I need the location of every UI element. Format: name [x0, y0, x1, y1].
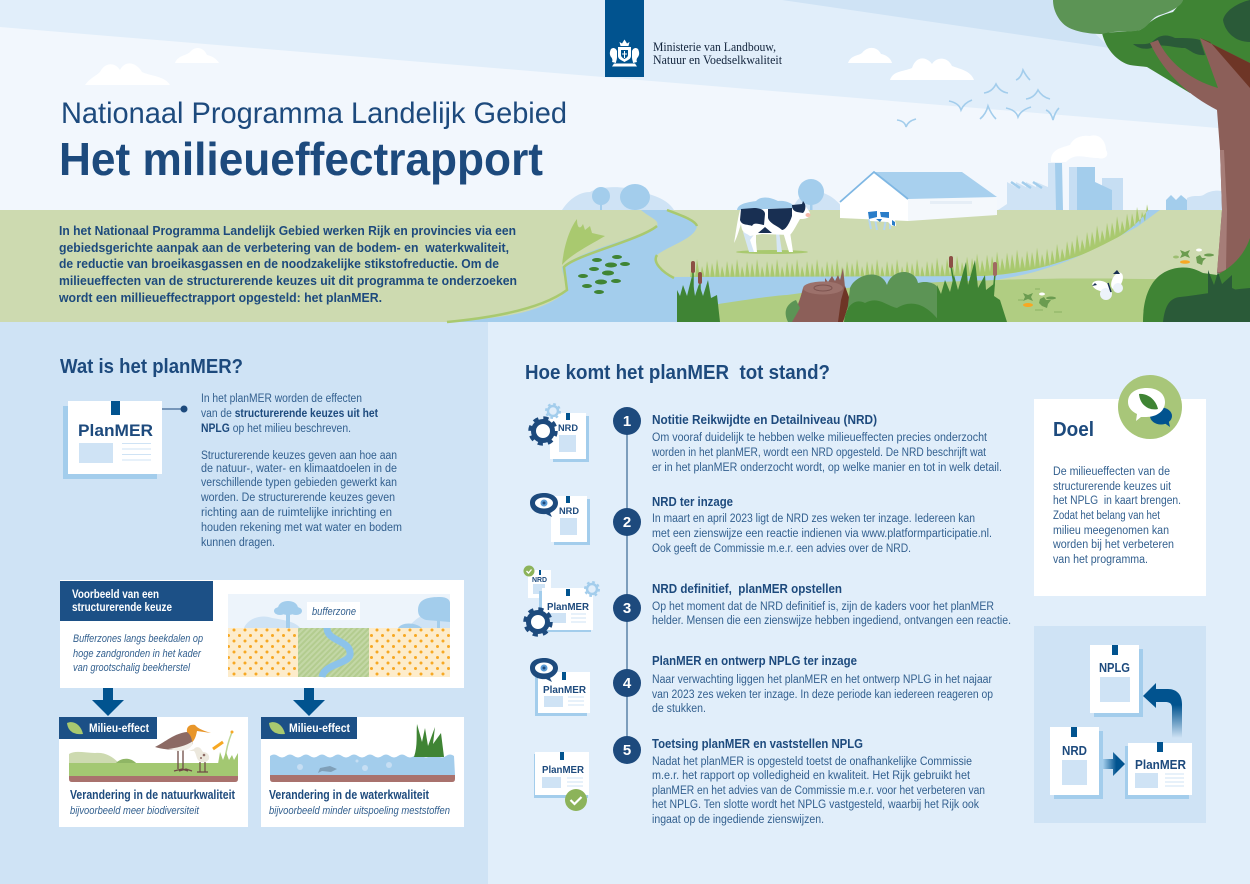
- icon: step 5: PlanMER: [542, 765, 585, 776]
- text: doel: worden bij het verbeteren: [1052, 539, 1174, 551]
- logo ribbon: [605, 0, 644, 77]
- step 5 text: ingaat op de ingediende zienswijzen.: [652, 814, 824, 826]
- reeds left: [677, 261, 720, 322]
- step 3 text: [652, 582, 1011, 627]
- title: Het milieueffectrapport: [59, 133, 543, 185]
- icon: step 3: PlanMER: [547, 602, 590, 613]
- sky: [0, 0, 1250, 210]
- document: planMER: [1125, 742, 1192, 799]
- riverside reeds: [562, 204, 1150, 278]
- text: explanation planMER: In het planMER worden de effecten: [201, 393, 362, 405]
- step 2 text: [652, 495, 992, 555]
- intro text: wordt een millieueffectrapport opgesteld: het planMER.: [58, 290, 382, 305]
- cow: [734, 201, 810, 254]
- step 5 text: het NPLG. Ten slotte wordt het NPLG vastgesteld, waarbij het Rijk ook: [652, 799, 979, 811]
- timeline: 5: [623, 742, 631, 759]
- step 4 text: PlanMER en ontwerp NPLG ter inzage: [652, 654, 857, 668]
- text: doel: structurerende keuzes uit: [1053, 481, 1172, 493]
- icon: step 2: NRD: [559, 506, 579, 517]
- step 3 text: NRD definitief, planMER opstellen: [652, 582, 842, 596]
- icon: step 5: [534, 752, 589, 811]
- background: lower panels: [0, 322, 1250, 884]
- arrow left: [92, 688, 124, 716]
- heading: doel: Doel: [1053, 419, 1094, 441]
- step 2 text: NRD ter inzage: [652, 495, 733, 509]
- text: Verandering in de waterkwaliteit: [269, 788, 430, 802]
- text: doel: van het programma.: [1053, 554, 1148, 566]
- text: [269, 788, 450, 817]
- step 4 text: de stukken.: [652, 703, 706, 715]
- text: explanation planMER: Structurerende keuzes geven aan hoe aan: [201, 450, 397, 462]
- heading: hoe komt het planMER tot stand: Hoe komt het planMER tot stand?: [525, 362, 830, 384]
- arrow: planMER to NPLG: [1143, 683, 1182, 738]
- intro text: In het Nationaal Programma Landelijk Gebied werken Rijk en provincies via een: [59, 223, 516, 238]
- chick: [189, 747, 209, 772]
- label: [59, 717, 157, 739]
- heading: voorbeeld: [60, 581, 213, 621]
- step 4 text: [652, 654, 993, 715]
- text: doel: [1052, 466, 1181, 566]
- text: explanation planMER: kunnen dragen.: [201, 537, 275, 549]
- intro text: gebiedsgerichte aanpak aan de verbetering van de bodem- en waterkwaliteit,: [59, 240, 509, 255]
- text: doel: Zodat het belang van het: [1053, 510, 1161, 522]
- text: explanation planMER: worden. De structurerende keuzes geven: [200, 492, 395, 504]
- icon: step 1: [530, 404, 589, 462]
- document: NRD: NRD: [1062, 743, 1087, 758]
- hero illustration: [0, 0, 1250, 322]
- bird: [155, 725, 211, 771]
- step 5 text: planMER en het advies van de Commissie m.e.r. voor het verbeteren van: [652, 785, 985, 797]
- icon: speech bubbles with leaf: [1118, 375, 1182, 439]
- text: Verandering in de natuurkwaliteit: [70, 788, 236, 802]
- text: explanation planMER: van de structurerende keuzes uit het: [201, 408, 378, 420]
- label: [261, 717, 357, 739]
- timeline: [613, 407, 641, 764]
- step 2 text: Ook geeft de Commissie m.e.r. een advies over de NRD.: [652, 543, 911, 555]
- text: doel: het NPLG in kaart brengen.: [1053, 495, 1181, 507]
- birds: [897, 70, 1059, 127]
- step 5 text: Nadat het planMER is opgesteld toetst de onafhankelijke Commissie: [652, 756, 972, 768]
- crest: [610, 40, 639, 66]
- document: NPLG: [1090, 645, 1143, 717]
- document: NRD: [1050, 727, 1103, 799]
- tree stump: [786, 268, 850, 322]
- panel: process diagram: [1034, 626, 1206, 823]
- heading: voorbeeld: Voorbeeld van een: [72, 589, 159, 601]
- arrow: NRD to planMER: [1103, 752, 1125, 776]
- panel: natuurkwaliteit: [59, 717, 248, 827]
- panel: voorbeeld: [60, 580, 464, 688]
- heading: voorbeeld: structurerende keuze: [72, 602, 172, 614]
- icon: step 1: NRD: [558, 423, 578, 434]
- title: Nationaal Programma Landelijk Gebied: [61, 97, 567, 130]
- step 1 text: Om vooraf duidelijk te hebben welke milieueffecten precies onderzocht: [652, 432, 988, 444]
- panel: doel: [1034, 375, 1206, 596]
- text: bufferzones: hoge zandgronden in het kader: [73, 648, 202, 660]
- text: explanation planMER: richting aan de ruimtelijke inrichting en: [201, 507, 392, 519]
- illustration: water: [270, 724, 455, 782]
- text: bufferzones: van grootschalig beekherstel: [73, 662, 190, 674]
- bufferzone illustration: bufferzone: [312, 606, 356, 618]
- step 1 text: [651, 413, 1002, 474]
- icon: planMER document: [63, 401, 188, 479]
- bufferzone illustration: [228, 594, 450, 677]
- step 5 text: [652, 737, 985, 826]
- flowers: [1018, 248, 1214, 312]
- icon: step 4: PlanMER: [543, 685, 587, 696]
- lily pads: [578, 255, 630, 294]
- text: doel: De milieueffecten van de: [1053, 466, 1170, 478]
- icon: step 4: [530, 658, 590, 716]
- ministry name: Natuur en Voedselkwaliteit: [653, 53, 782, 67]
- text: explanation planMER: verschillende typen gebieden gewerkt kan: [201, 477, 397, 489]
- label: Milieu-effect: [289, 723, 350, 735]
- text: bijvoorbeeld meer biodiversiteit: [70, 805, 200, 817]
- text: explanation planMER: NPLG op het milieu beschreven.: [201, 423, 351, 435]
- text: [70, 788, 236, 817]
- barn: [840, 172, 997, 221]
- river: [447, 210, 1160, 322]
- text: explanation planMER: houden rekening met wat water en bodem: [201, 522, 402, 534]
- text: bufferzones: [73, 633, 203, 674]
- branch and trunk: [1150, 38, 1250, 280]
- bottom right bushes: [1143, 238, 1250, 322]
- heading: wat is het planMER: Wat is het planMER?: [60, 356, 243, 378]
- text: bijvoorbeeld minder uitspoeling meststoffen: [269, 805, 450, 817]
- text: bufferzones: Bufferzones langs beekdalen op: [73, 633, 203, 645]
- tree: [1053, 0, 1250, 280]
- step 2 text: met een zienswijze een reactie indienen via www.platformparticipatie.nl.: [652, 528, 992, 540]
- step 3 text: helder. Mensen die een zienswijze hebben ingediend, ontvangen een reactie.: [652, 615, 1011, 627]
- reeds right: [937, 256, 1007, 322]
- step 2 text: In maart en april 2023 ligt de NRD zes weken ter inzage. Iedereen kan: [652, 513, 975, 525]
- icon: step 3: NRD: [532, 577, 547, 584]
- text: explanation planMER: de natuur-, water- en klimaatdoelen in de: [201, 463, 397, 475]
- timeline: 3: [623, 600, 631, 617]
- bushes: [844, 272, 940, 322]
- label: Milieu-effect: [89, 723, 149, 735]
- text: doel: milieu meegenomen kan: [1053, 525, 1169, 537]
- timeline: 1: [623, 413, 631, 430]
- title: [59, 97, 567, 185]
- ministry name: Ministerie van Landbouw,: [653, 40, 776, 54]
- step 3 text: Op het moment dat de NRD definitief is, zijn de kaders voor het planMER: [652, 601, 994, 613]
- clouds: [85, 48, 974, 85]
- step 1 text: worden in het planMER, wordt een NRD opgesteld. De NRD beschrijft wat: [651, 447, 987, 459]
- intro text: de reductie van broeikasgassen en de noodzakelijke stikstofreductie. Om de: [59, 256, 499, 271]
- intro text: milieueffecten van de structurerende keuzes uit dit programma te onderzoeken: [59, 273, 517, 288]
- foreground grass: [718, 278, 1250, 322]
- timeline: 4: [623, 675, 632, 692]
- icon: planMER document: PlanMER: [78, 421, 153, 440]
- panel: waterkwaliteit: [261, 717, 464, 827]
- step 1 text: er in het planMER onderzocht wordt, op welke manier en tot in welk detail.: [652, 462, 1002, 474]
- meadow: [0, 210, 1250, 322]
- orange flower and grass: [213, 730, 238, 764]
- step 4 text: Naar verwachting liggen het planMER en het ontwerp NPLG in het najaar: [652, 674, 992, 686]
- document: planMER: PlanMER: [1135, 757, 1187, 772]
- step 4 text: van 2023 zes weken ter inzage. In deze periode kan iedereen reageren op: [652, 689, 993, 701]
- illustration: nature: [69, 725, 238, 782]
- ministry name: [653, 40, 782, 67]
- icon: step 2: [530, 493, 590, 545]
- background trees and factory: [562, 135, 1224, 210]
- arrow right: [293, 688, 325, 716]
- icon: step 3: [524, 566, 599, 635]
- calf: [868, 211, 896, 230]
- step 1 text: Notitie Reikwijdte en Detailniveau (NRD): [652, 413, 877, 427]
- timeline: 2: [623, 514, 631, 531]
- step 5 text: m.e.r. het rapport op volledigheid en kwaliteit. Het Rijk gebruikt het: [652, 770, 971, 782]
- step 5 text: Toetsing planMER en vaststellen NPLG: [652, 737, 863, 751]
- document: NPLG: NPLG: [1099, 660, 1130, 675]
- crown: [1102, 0, 1250, 93]
- text: explanation planMER: [200, 393, 402, 549]
- butterfly: [1091, 270, 1125, 300]
- intro text: [58, 223, 517, 305]
